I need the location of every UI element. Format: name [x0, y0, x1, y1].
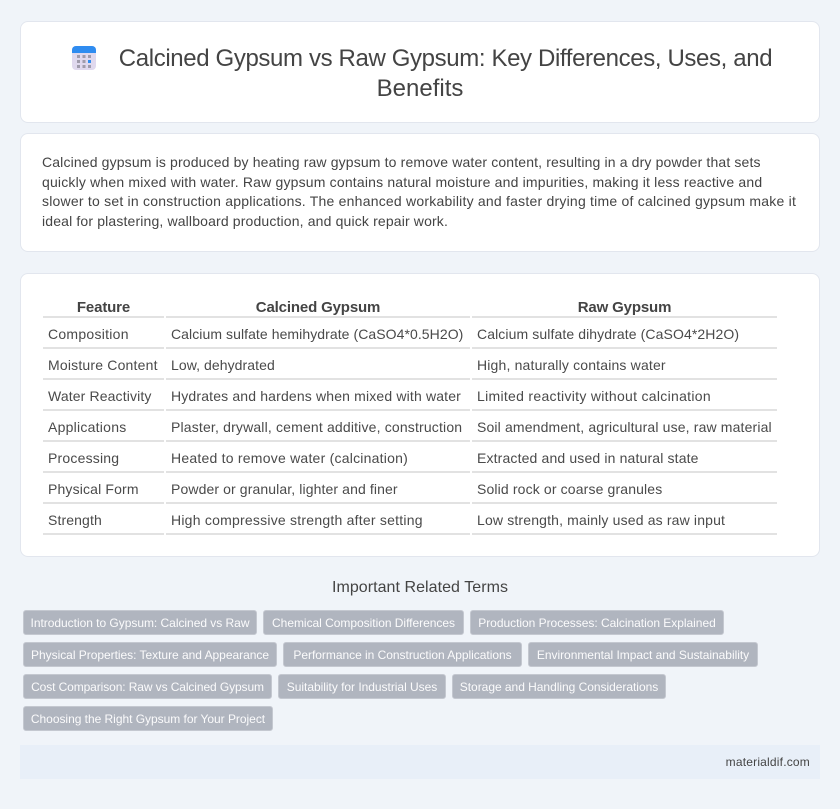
comparison table: Composition [48, 326, 129, 342]
heading: important related terms: Important Related Terms [332, 579, 508, 596]
comparison table: Soil amendment, agricultural use, raw material [477, 419, 772, 435]
related term tags: Physical Properties: Texture and Appearance [31, 648, 269, 662]
related term tags: Cost Comparison: Raw vs Calcined Gypsum [31, 680, 264, 694]
comparison table: Applications [48, 419, 126, 435]
text block: introduction [42, 154, 796, 229]
text block: introduction: quickly when mixed with water. Raw gypsum contains natural moisture and impurities, making it less reactive and [42, 174, 762, 190]
footer source text: materialdif.com [726, 755, 810, 769]
panel: title header [20, 21, 820, 123]
related term tags: Environmental Impact and Sustainability [537, 648, 749, 662]
comparison table: Raw Gypsum [578, 299, 671, 316]
title: Benefits [377, 74, 463, 102]
related term tags: Production Processes: Calcination Explained [478, 616, 716, 630]
related term tags: Storage and Handling Considerations [460, 680, 658, 694]
comparison table: Physical Form [48, 481, 139, 497]
text block: introduction: Calcined gypsum is produced by heating raw gypsum to remove water content, resulting in a dry powder that sets [42, 154, 761, 170]
comparison table: Calcium sulfate dihydrate (CaSO4*2H2O) [477, 326, 739, 342]
panel: introduction [20, 133, 820, 252]
title [119, 45, 772, 102]
comparison table: Low, dehydrated [171, 357, 275, 373]
text block: introduction: slower to set in construction applications. The enhanced workability and faster drying time of calcined gypsum make it [42, 193, 796, 209]
comparison table: Solid rock or coarse granules [477, 481, 662, 497]
comparison table: Plaster, drywall, cement additive, construction [171, 419, 462, 435]
comparison table: Limited reactivity without calcination [477, 388, 711, 404]
panel: comparison table [20, 273, 820, 557]
related term tags: Performance in Construction Applications [293, 648, 512, 662]
comparison table [43, 299, 777, 535]
related term tags: Introduction to Gypsum: Calcined vs Raw [31, 616, 249, 630]
comparison table: Feature [77, 299, 130, 316]
title: Calcined Gypsum vs Raw Gypsum: Key Differences, Uses, and [119, 45, 772, 72]
comparison table: High, naturally contains water [477, 357, 666, 373]
comparison table: High compressive strength after setting [171, 512, 423, 528]
comparison table: Calcium sulfate hemihydrate (CaSO4*0.5H2O) [171, 326, 463, 342]
related term tags: Chemical Composition Differences [272, 616, 455, 630]
comparison table: Extracted and used in natural state [477, 450, 699, 466]
comparison table: Calcined Gypsum [256, 299, 380, 316]
comparison table: Low strength, mainly used as raw input [477, 512, 725, 528]
comparison table: Hydrates and hardens when mixed with water [171, 388, 461, 404]
related term tags [23, 610, 758, 731]
comparison table: Processing [48, 450, 119, 466]
comparison table: Powder or granular, lighter and finer [171, 481, 398, 497]
related term tags: Choosing the Right Gypsum for Your Project [31, 712, 265, 726]
footer bar [20, 745, 820, 779]
comparison table: Water Reactivity [48, 388, 151, 404]
comparison table: Strength [48, 512, 102, 528]
comparison table: Moisture Content [48, 357, 158, 373]
comparison table: Heated to remove water (calcination) [171, 450, 408, 466]
related term tags: Suitability for Industrial Uses [287, 680, 437, 694]
icon: calendar [72, 46, 96, 70]
text block: introduction: ideal for plastering, wallboard production, and quick repair work. [42, 213, 448, 229]
